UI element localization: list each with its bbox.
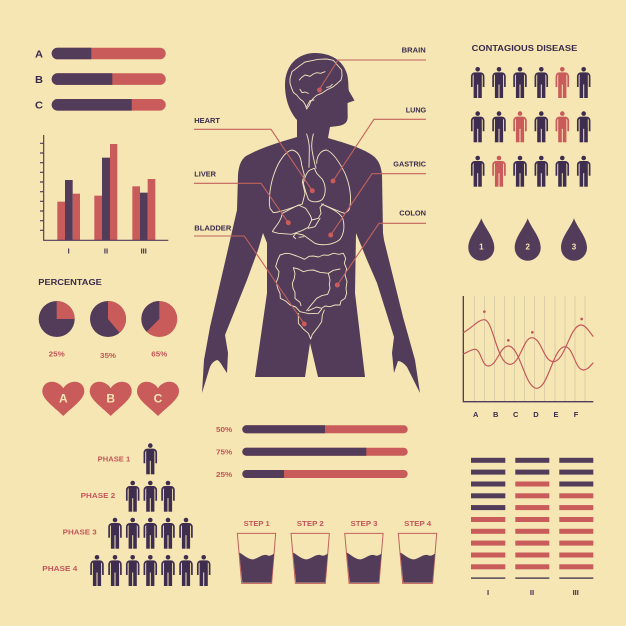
colon: [276, 253, 347, 312]
people grid: [472, 67, 590, 187]
drops: [468, 218, 587, 261]
stacked stripes chart: [471, 458, 593, 597]
panel: percentage bars: [216, 425, 408, 479]
leader: colon: [337, 223, 426, 285]
stomach: [293, 204, 344, 245]
leader: liver: [194, 183, 288, 223]
organ labels: HEART: [194, 116, 220, 125]
bar chart: III: [141, 246, 147, 256]
drop 2: 2: [525, 243, 530, 252]
bar B: B: [35, 75, 43, 86]
step 4: [398, 519, 437, 583]
leader: gastric: [331, 174, 426, 235]
pie 25%: 25%: [49, 350, 65, 358]
panel: steps: [237, 519, 437, 583]
liver: [272, 205, 312, 234]
organ labels: LIVER: [194, 169, 217, 178]
bar chart: [40, 135, 168, 256]
organ dots: [286, 88, 340, 326]
bar chart: II: [104, 246, 108, 256]
line chart: F: [574, 410, 579, 419]
pie 35%: 35%: [100, 351, 116, 360]
bar 25%: [216, 470, 408, 479]
heart C: C: [154, 392, 163, 406]
phase 3: [63, 518, 192, 549]
drop 3: 3: [572, 243, 577, 252]
step 3: STEP 3: [350, 519, 378, 528]
phase 4: [42, 555, 210, 586]
bladder: [298, 309, 324, 339]
panel: A B C progress bars: [35, 48, 166, 112]
leader: brain: [319, 60, 426, 90]
step 2: STEP 2: [297, 519, 324, 528]
pie 65%: 65%: [151, 350, 168, 358]
bar 50%: 50%: [216, 425, 233, 434]
bar 75%: 75%: [216, 447, 233, 456]
line chart: C: [513, 410, 519, 419]
step 1: [237, 519, 276, 583]
right lung: [317, 150, 351, 213]
bar C: C: [35, 101, 43, 112]
line chart: D: [533, 410, 539, 419]
step 4: STEP 4: [404, 519, 432, 528]
leader: lung: [333, 119, 426, 181]
organ labels: [194, 46, 427, 232]
organ leader lines: [194, 60, 426, 324]
heading: percentage: PERCENTAGE: [38, 278, 103, 287]
organ labels: BRAIN: [402, 46, 426, 55]
organs: [269, 59, 351, 339]
column II: II: [530, 588, 534, 597]
line chart: E: [553, 410, 559, 419]
heart A: A: [59, 392, 68, 406]
heart: [303, 168, 325, 202]
leader: bladder: [194, 236, 304, 324]
hearts: [42, 382, 179, 416]
line chart: B: [493, 410, 499, 419]
phase 1: PHASE 1: [98, 454, 130, 463]
bar 50%: [216, 425, 408, 434]
organ labels: BLADDER: [194, 223, 232, 232]
bar A: A: [35, 50, 43, 60]
organ labels: GASTRIC: [393, 160, 427, 169]
bar chart: I: [68, 246, 70, 256]
bar 25%: 25%: [216, 470, 233, 479]
heart B: B: [106, 392, 115, 406]
brain: [290, 59, 342, 109]
phase 2: [81, 481, 174, 512]
organ labels: LUNG: [406, 106, 426, 115]
column I: I: [487, 588, 489, 597]
pie charts: [39, 301, 177, 360]
left lung: [269, 150, 305, 213]
pancreas: [308, 204, 323, 228]
leader: heart: [194, 129, 312, 191]
body silhouette: [202, 53, 420, 393]
phase 3: PHASE 3: [63, 527, 97, 536]
bar 75%: [216, 447, 408, 456]
phase 1: [98, 443, 156, 474]
step 1: STEP 1: [244, 519, 270, 528]
organ labels: COLON: [399, 209, 426, 218]
phase 2: PHASE 2: [81, 491, 115, 500]
column III: III: [573, 588, 579, 597]
phase 4: PHASE 4: [42, 564, 78, 573]
step 2: [291, 519, 329, 583]
line chart: A: [473, 410, 479, 419]
drop 1: 1: [479, 243, 484, 252]
phase pyramid: [42, 443, 210, 586]
step 3: [345, 519, 383, 583]
heading: contagious disease: CONTAGIOUS DISEASE: [472, 44, 578, 53]
line chart: [463, 296, 593, 419]
trachea: [307, 134, 316, 168]
